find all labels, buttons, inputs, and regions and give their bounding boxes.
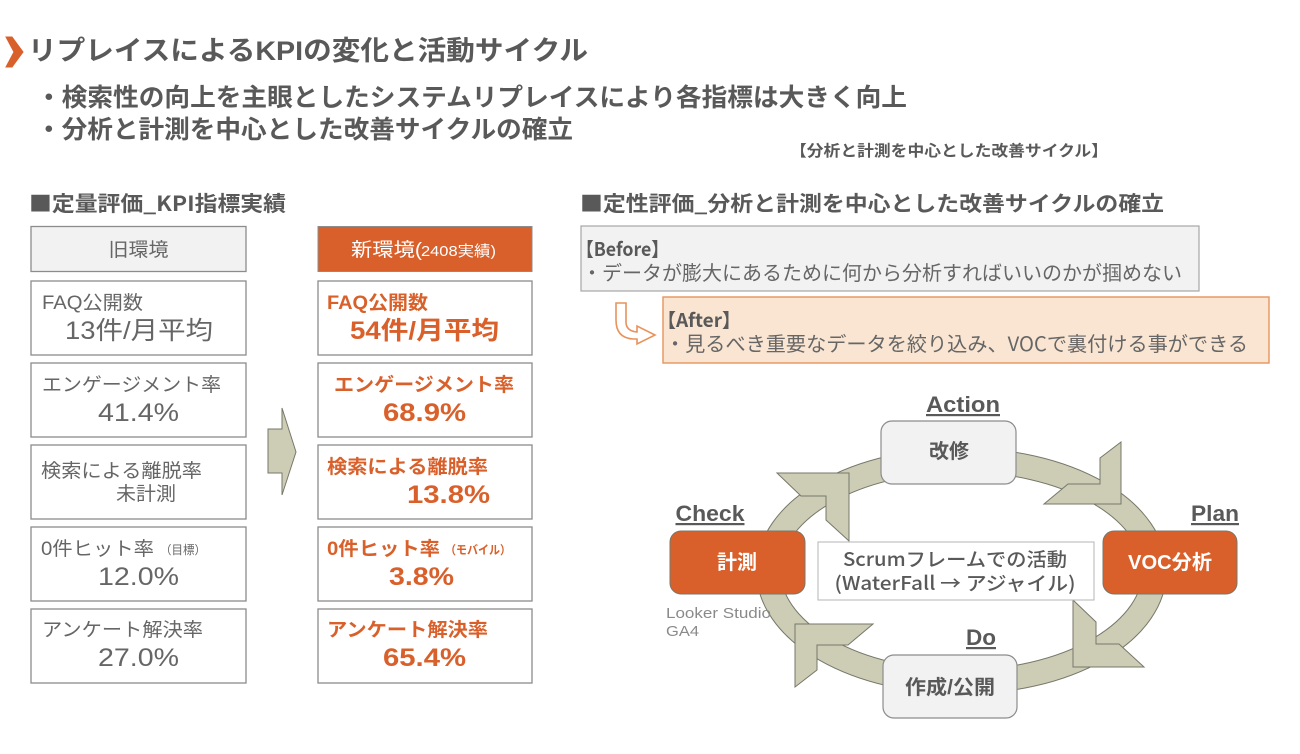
metric: survey old: アンケート解決率 [42, 619, 203, 641]
panel: after: 【After】 [657, 306, 741, 333]
arrow head: to do [1073, 600, 1144, 667]
metric: search exit new: 検索による離脱率 [327, 456, 488, 478]
cycle diagram [666, 392, 1239, 718]
metric: search exit old [31, 445, 246, 519]
header: old: 旧環境 [108, 239, 168, 261]
center note: Scrumフレームでの活動 [843, 545, 1067, 572]
summary bullets [36, 78, 907, 146]
panel: before [576, 226, 1199, 291]
node: plan [1103, 531, 1237, 594]
heading: quantitative: ■定量評価_KPI指標実績 [29, 188, 286, 218]
node: action: 改修 [929, 440, 969, 463]
metric: survey old: 27.0% [98, 644, 179, 672]
heading: qualitative: ■定性評価_分析と計測を中心とした改善サイクルの確立 [580, 188, 1164, 218]
metric: zero hit new: （モバイル） [445, 543, 511, 557]
panel: after [657, 297, 1269, 363]
panel: old environment [31, 226, 246, 683]
metric: FAQ new: 54件/月平均 [350, 317, 499, 345]
metric: survey new: 65.4% [383, 644, 466, 672]
node: check [670, 531, 805, 594]
panel: before: ・データが膨大にあるために何から分析すればいいのかが掴めない [582, 257, 1182, 286]
metric: engagement old: エンゲージメント率 [42, 374, 221, 396]
panel: after: ・見るべき重要なデータを絞り込み、VOCで裏付ける事ができる [665, 328, 1248, 357]
label: check: Check [676, 501, 745, 526]
metric: FAQ old [31, 281, 246, 355]
metric: engagement new [318, 363, 532, 437]
metric: zero hit old: 0件ヒット率 [41, 538, 154, 560]
metric: search exit old: 未計測 [116, 483, 176, 505]
label: plan: Plan [1191, 501, 1239, 526]
node: do [883, 655, 1017, 718]
metric: zero hit old: （目標） [160, 543, 206, 557]
metric: search exit new [318, 445, 532, 519]
arrow head: to check [795, 624, 873, 687]
icon: curved arrow [616, 303, 655, 344]
cycle ring [768, 460, 1154, 682]
metric: zero hit old: 12.0% [98, 563, 179, 591]
center note: (WaterFall → アジャイル) [834, 569, 1076, 596]
metric: FAQ old: FAQ公開数 [42, 292, 143, 314]
metric: FAQ new [318, 281, 532, 355]
metric: search exit old: 検索による離脱率 [41, 460, 202, 482]
summary bullets: ・検索性の向上を主眼としたシステムリプレイスにより各指標は大きく向上 [36, 78, 907, 114]
title: リプレイスによるKPIの変化と活動サイクル [28, 36, 588, 66]
cycle caption: 【分析と計測を中心とした改善サイクル】 [790, 139, 1108, 161]
summary bullets: ・分析と計測を中心とした改善サイクルの確立 [36, 110, 573, 146]
header: new: 新環境( [351, 239, 423, 261]
center note [818, 542, 1094, 600]
metric: zero hit old [31, 527, 246, 601]
metric: engagement new: 68.9% [383, 399, 466, 427]
metric: FAQ old: 13件/月平均 [65, 317, 213, 345]
panel: before: 【Before】 [576, 235, 669, 262]
metric: survey new [318, 609, 532, 683]
metric: zero hit new [318, 527, 532, 601]
arrow: old to new [268, 408, 296, 495]
metric: search exit new: 13.8% [407, 481, 490, 509]
node: do: 作成/公開 [905, 675, 995, 699]
node: action [881, 421, 1016, 484]
metric: survey new: アンケート解決率 [327, 619, 488, 641]
node: plan: VOC分析 [1128, 551, 1212, 574]
metric: engagement new: エンゲージメント率 [334, 374, 514, 396]
tool note [666, 605, 771, 640]
header: new: 2408実績) [421, 243, 496, 260]
metric: zero hit new: 3.8% [389, 563, 454, 591]
metric: zero hit new: 0件ヒット率 [327, 538, 440, 560]
header: old [31, 226, 246, 272]
arrow head: to action [777, 473, 849, 541]
node: check: 計測 [717, 551, 757, 574]
metric: engagement old [31, 363, 246, 437]
arrow head: to plan [1044, 442, 1121, 504]
tool note: Looker Studio [666, 605, 771, 622]
panel: new environment [318, 226, 532, 683]
header: new [318, 226, 532, 272]
label: do: Do [966, 625, 996, 650]
metric: survey old [31, 609, 246, 683]
metric: FAQ new: FAQ公開数 [327, 292, 428, 314]
label: action: Action [926, 392, 1000, 417]
tool note: GA4 [666, 623, 699, 640]
metric: engagement old: 41.4% [98, 399, 179, 427]
